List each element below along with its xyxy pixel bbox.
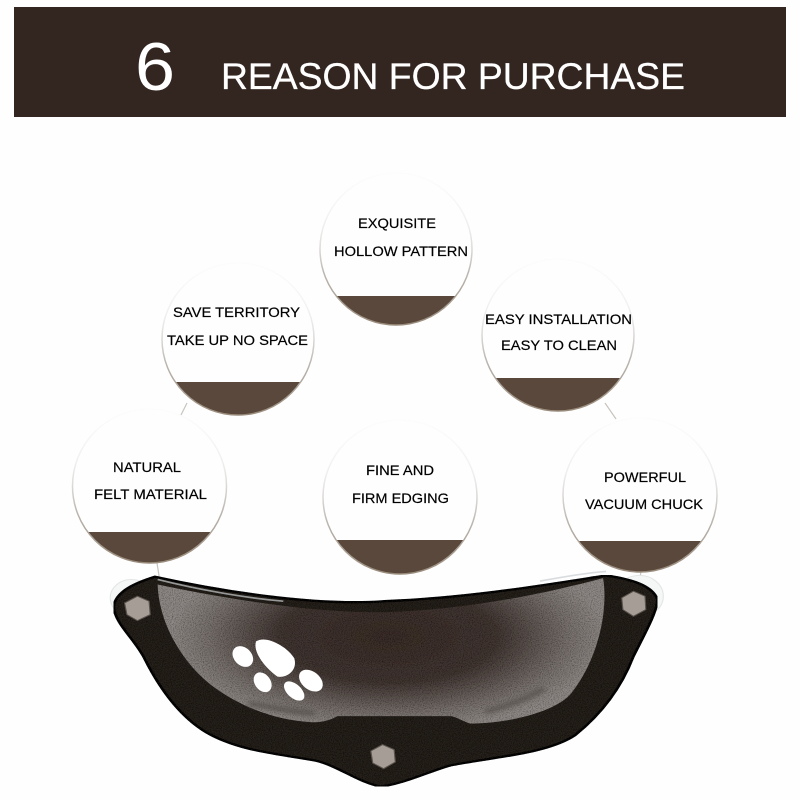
circle: exquisite hollow pattern (319, 201, 473, 326)
circle: powerful vacuum chuck: POWERFUL (604, 469, 686, 485)
circle: natural felt material: NATURAL (113, 459, 181, 475)
circle: exquisite hollow pattern: HOLLOW PATTERN (334, 243, 468, 259)
circle: fine and firm edging (322, 448, 478, 575)
paw print cutouts (228, 639, 328, 704)
circle: fine and firm edging: FINE AND (366, 462, 434, 478)
circle: powerful vacuum chuck: VACUUM CHUCK (585, 496, 704, 512)
suction cups (110, 575, 663, 617)
circle: natural felt material (72, 437, 228, 564)
bolts (125, 591, 646, 769)
connector lines between circles (157, 403, 641, 582)
heading: REASON FOR PURCHASE (221, 56, 685, 97)
header banner (14, 7, 786, 117)
top edge highlight (158, 571, 606, 601)
circle: save territory: SAVE TERRITORY (173, 304, 301, 320)
circle: save territory: TAKE UP NO SPACE (167, 332, 308, 348)
felt wrinkles (248, 688, 544, 713)
hammock frame (114, 575, 657, 786)
banner background (14, 7, 786, 117)
circle: natural felt material: FELT MATERIAL (94, 486, 207, 502)
circle: fine and firm edging: FIRM EDGING (352, 490, 449, 506)
circle: easy installation: EASY INSTALLATION (485, 311, 632, 327)
circle: easy installation: EASY TO CLEAN (501, 337, 617, 353)
circle: save territory (161, 291, 315, 416)
circle: exquisite hollow pattern: EXQUISITE (358, 215, 436, 231)
cat hammock product photo (110, 571, 663, 786)
felt bed (158, 578, 604, 724)
circle: powerful vacuum chuck (562, 446, 718, 573)
circle: easy installation (481, 287, 635, 412)
number 6: 6 (135, 29, 175, 105)
